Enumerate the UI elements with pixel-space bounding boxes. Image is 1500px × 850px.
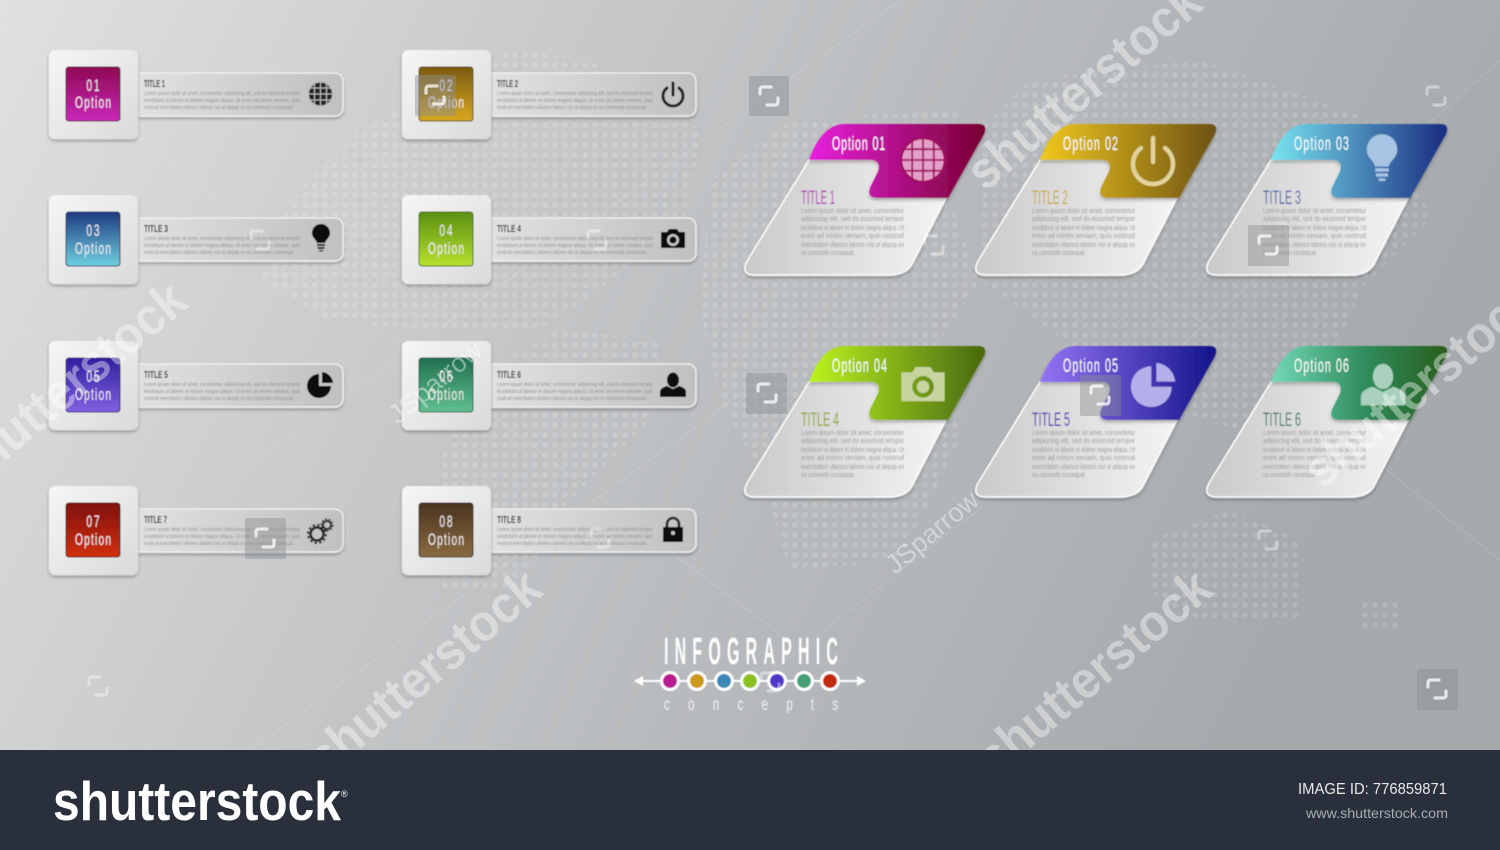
card 03: TITLE 3 — [144, 224, 168, 235]
card 01 — [49, 50, 343, 139]
card 08: 08 — [439, 511, 453, 531]
panel 06: ea commodo consequat. — [1263, 472, 1317, 479]
card 02: Lorem ipsum dolor sit amet, consectetur adipiscing elit, sed do eiusmod tempor — [497, 91, 653, 97]
card 08: incididunt ut labore et dolore magna aliqua. Ut enim ad minim veniam, quis — [497, 534, 653, 540]
card 06: nostrud exercitation ullamco laboris nisi ut aliquip ex ea commodo consequat. — [497, 396, 647, 402]
card 06: Option — [428, 384, 464, 404]
card 05 — [49, 341, 343, 430]
panel 04: ea commodo consequat. — [801, 472, 855, 479]
panel 01: adipiscing elit, sed do eiusmod tempor — [801, 216, 905, 223]
card 03 — [49, 195, 343, 284]
panel 03: enim ad minim veniam, quis nostrud — [1263, 233, 1366, 240]
panel 02: exercitation ullamco laboris nisi ut aliquip ex — [1032, 242, 1135, 249]
card 07: Lorem ipsum dolor sit amet, consectetur adipiscing elit, sed do eiusmod tempor — [144, 527, 300, 533]
panel 03: incididunt ut labore et dolore magna aliqua. Ut — [1263, 225, 1366, 232]
panel 04: TITLE 4 — [801, 410, 839, 431]
panel 06: enim ad minim veniam, quis nostrud — [1263, 455, 1366, 462]
panel 02: adipiscing elit, sed do eiusmod tempor — [1032, 216, 1136, 223]
panel 06: TITLE 6 — [1263, 410, 1301, 431]
card 03: nostrud exercitation ullamco laboris nisi ut aliquip ex ea commodo consequat. — [144, 250, 294, 256]
card 08 — [402, 486, 696, 575]
card 05: Lorem ipsum dolor sit amet, consectetur adipiscing elit, sed do eiusmod tempor — [144, 382, 300, 388]
card 07: Option — [75, 529, 111, 549]
panel 05: incididunt ut labore et dolore magna aliqua. Ut — [1032, 447, 1135, 454]
card 08: Lorem ipsum dolor sit amet, consectetur adipiscing elit, sed do eiusmod tempor — [497, 527, 653, 533]
panel 03: Lorem ipsum dolor sit amet, consectetur — [1263, 208, 1367, 215]
panel 05: ea commodo consequat. — [1032, 472, 1086, 479]
card 03: Option — [75, 238, 111, 258]
card 03: incididunt ut labore et dolore magna aliqua. Ut enim ad minim veniam, quis — [144, 243, 300, 249]
panel 01: Option 01 — [832, 134, 885, 155]
watermarks: shutterstock — [295, 558, 553, 787]
card 04: nostrud exercitation ullamco laboris nisi ut aliquip ex ea commodo consequat. — [497, 250, 647, 256]
card 06 — [402, 341, 696, 430]
panel 06: exercitation ullamco laboris nisi ut aliquip ex — [1263, 464, 1366, 471]
card 08: nostrud exercitation ullamco laboris nisi ut aliquip ex ea commodo consequat. — [497, 541, 647, 547]
card 02: incididunt ut labore et dolore magna aliqua. Ut enim ad minim veniam, quis — [497, 98, 653, 104]
card 02: TITLE 2 — [497, 79, 518, 90]
panel 01 — [745, 124, 985, 275]
panel 01: enim ad minim veniam, quis nostrud — [801, 233, 904, 240]
footer bar: www.shutterstock.com — [1305, 805, 1448, 821]
panel 03: adipiscing elit, sed do eiusmod tempor — [1263, 216, 1367, 223]
panel 04: adipiscing elit, sed do eiusmod tempor — [801, 438, 905, 445]
panel 01: incididunt ut labore et dolore magna aliqua. Ut — [801, 225, 904, 232]
panel 01: TITLE 1 — [801, 188, 835, 209]
card 04: Option — [428, 238, 464, 258]
card 04: incididunt ut labore et dolore magna aliqua. Ut enim ad minim veniam, quis — [497, 243, 653, 249]
panel 05: Lorem ipsum dolor sit amet, consectetur — [1032, 430, 1136, 437]
panel 02 — [976, 124, 1216, 275]
card 06: incididunt ut labore et dolore magna aliqua. Ut enim ad minim veniam, quis — [497, 389, 653, 395]
infographic concepts logo: concepts — [664, 695, 839, 715]
panel 05: TITLE 5 — [1032, 410, 1070, 431]
card 02 — [402, 50, 696, 139]
panel 04: enim ad minim veniam, quis nostrud — [801, 455, 904, 462]
card 07: TITLE 7 — [144, 515, 167, 526]
footer bar: ® — [341, 789, 348, 799]
card 05: nostrud exercitation ullamco laboris nisi ut aliquip ex ea commodo consequat. — [144, 396, 294, 402]
card 06: Lorem ipsum dolor sit amet, consectetur adipiscing elit, sed do eiusmod tempor — [497, 382, 653, 388]
panel 04 — [745, 346, 985, 497]
card 03: 03 — [86, 220, 100, 240]
watermarks: JSparrow — [880, 484, 985, 580]
watermarks: JSparrow — [383, 334, 488, 430]
panel 01: Lorem ipsum dolor sit amet, consectetur — [801, 208, 905, 215]
panel 01: ea commodo consequat. — [801, 250, 855, 257]
card 02: nostrud exercitation ullamco laboris nisi ut aliquip ex ea commodo consequat. — [497, 105, 647, 111]
card 07: incididunt ut labore et dolore magna aliqua. Ut enim ad minim veniam, quis — [144, 534, 300, 540]
card 02: 02 — [439, 75, 453, 95]
panel 05: exercitation ullamco laboris nisi ut aliquip ex — [1032, 464, 1135, 471]
card 05: 05 — [86, 366, 100, 386]
panel 06: adipiscing elit, sed do eiusmod tempor — [1263, 438, 1367, 445]
panel 02: Option 02 — [1063, 134, 1118, 155]
panel 05: Option 05 — [1063, 356, 1118, 377]
card 04 — [402, 195, 696, 284]
card 05: incididunt ut labore et dolore magna aliqua. Ut enim ad minim veniam, quis — [144, 389, 300, 395]
panel 04: exercitation ullamco laboris nisi ut aliquip ex — [801, 464, 904, 471]
card 02: Option — [428, 92, 464, 112]
footer bar: shutterstock — [53, 770, 341, 832]
panel 06: Option 06 — [1294, 356, 1349, 377]
panel 04: Option 04 — [832, 356, 887, 377]
card 04: TITLE 4 — [497, 224, 521, 235]
infographic concepts logo: INFOGRAPHIC — [664, 631, 838, 673]
panel 03: ea commodo consequat. — [1263, 250, 1317, 257]
panel 03: Option 03 — [1294, 134, 1349, 155]
card 06: 06 — [439, 366, 453, 386]
card 07 — [49, 486, 343, 575]
panel 04: Lorem ipsum dolor sit amet, consectetur — [801, 430, 905, 437]
panel 06 — [1207, 346, 1447, 497]
panel 03 — [1207, 124, 1447, 275]
panel 02: TITLE 2 — [1032, 188, 1068, 209]
card 04: 04 — [439, 220, 453, 240]
card 05: TITLE 5 — [144, 370, 168, 381]
card 08: TITLE 8 — [497, 515, 521, 526]
card 01: incididunt ut labore et dolore magna aliqua. Ut enim ad minim veniam, quis — [144, 98, 300, 104]
footer bar: IMAGE ID: 776859871 — [1298, 781, 1447, 798]
panel 05: adipiscing elit, sed do eiusmod tempor — [1032, 438, 1136, 445]
small option cards — [49, 50, 696, 575]
card 07: 07 — [86, 511, 100, 531]
footer bar — [0, 750, 1500, 850]
panel 04: incididunt ut labore et dolore magna aliqua. Ut — [801, 447, 904, 454]
card 06: TITLE 6 — [497, 370, 521, 381]
panel 01: exercitation ullamco laboris nisi ut aliquip ex — [801, 242, 904, 249]
card 01: 01 — [86, 75, 100, 95]
card 01: nostrud exercitation ullamco laboris nisi ut aliquip ex ea commodo consequat. — [144, 105, 294, 111]
card 01: Option — [75, 92, 111, 112]
panel 03: exercitation ullamco laboris nisi ut aliquip ex — [1263, 242, 1366, 249]
panel 02: Lorem ipsum dolor sit amet, consectetur — [1032, 208, 1136, 215]
card 08: Option — [428, 529, 464, 549]
card 01: Lorem ipsum dolor sit amet, consectetur adipiscing elit, sed do eiusmod tempor — [144, 91, 300, 97]
dotted world map — [260, 50, 1430, 630]
watermarks: shutterstock — [965, 558, 1223, 787]
panel 02: incididunt ut labore et dolore magna aliqua. Ut — [1032, 225, 1135, 232]
card 05: Option — [75, 384, 111, 404]
card 04: Lorem ipsum dolor sit amet, consectetur adipiscing elit, sed do eiusmod tempor — [497, 236, 653, 242]
card 03: Lorem ipsum dolor sit amet, consectetur adipiscing elit, sed do eiusmod tempor — [144, 236, 300, 242]
card 01: TITLE 1 — [144, 79, 165, 90]
panel 02: ea commodo consequat. — [1032, 250, 1086, 257]
large option panels — [745, 124, 1447, 497]
panel 05 — [976, 346, 1216, 497]
panel 03: TITLE 3 — [1263, 188, 1301, 209]
panel 06: Lorem ipsum dolor sit amet, consectetur — [1263, 430, 1367, 437]
panel 02: enim ad minim veniam, quis nostrud — [1032, 233, 1135, 240]
panel 05: enim ad minim veniam, quis nostrud — [1032, 455, 1135, 462]
panel 06: incididunt ut labore et dolore magna aliqua. Ut — [1263, 447, 1366, 454]
infographic concepts logo — [634, 631, 866, 715]
card 07: nostrud exercitation ullamco laboris nisi ut aliquip ex ea commodo consequat. — [144, 541, 294, 547]
